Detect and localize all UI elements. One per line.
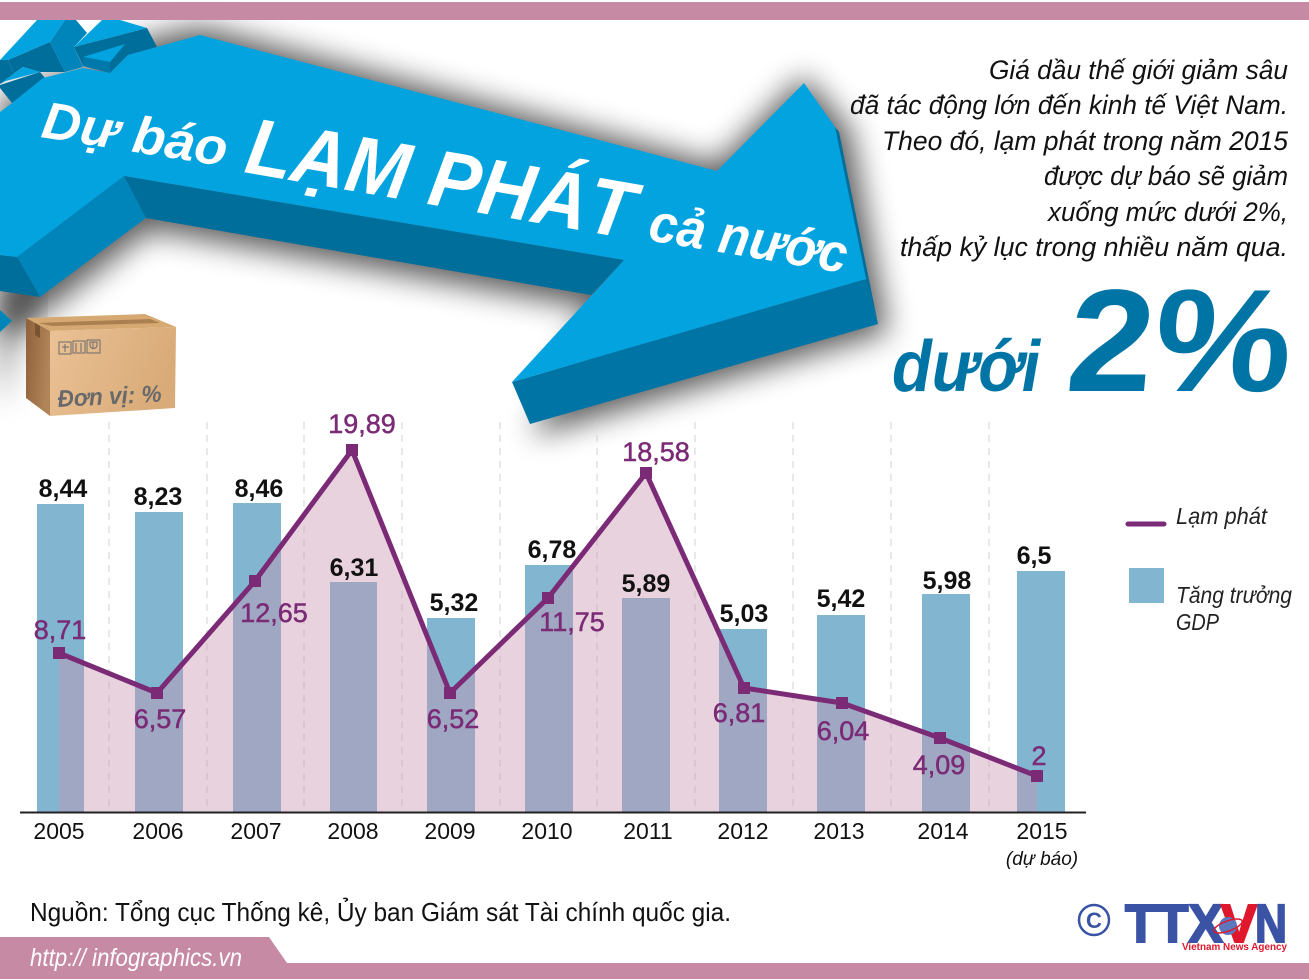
logo: TTXVN: Vietnam News Agency [1182, 941, 1287, 953]
inflation value labels: 4,09 [913, 750, 965, 780]
inflation value labels: 6,81 [713, 698, 765, 728]
GDP value labels: 6,31 [330, 554, 378, 582]
back ribbon left [0, 20, 65, 60]
logo: TTXVN: C [1086, 908, 1102, 933]
grid lines [109, 422, 989, 812]
year labels [33, 818, 1078, 870]
year labels: 2015 [1016, 818, 1068, 844]
footer band with URL: http:// infographics.vn [30, 944, 242, 972]
year labels: (dự báo) [1006, 849, 1078, 870]
GDP bars [37, 503, 1065, 812]
title: LẠM PHÁT [240, 101, 647, 256]
GDP value labels: 5,42 [817, 585, 865, 613]
back ribbon right [74, 20, 147, 47]
year labels: 2010 [521, 818, 573, 844]
year labels: 2007 [230, 818, 282, 844]
GDP value labels: 5,98 [923, 567, 971, 595]
year labels: 2013 [813, 818, 865, 844]
axis baseline [20, 812, 1086, 814]
inflation area [59, 450, 1037, 812]
legend: GDP [1176, 609, 1220, 635]
inflation value labels: 6,04 [817, 716, 869, 746]
title: cả nước [645, 193, 852, 285]
inflation value labels [34, 409, 1047, 780]
inflation value labels: 11,75 [539, 607, 605, 637]
inflation value labels: 6,52 [427, 704, 479, 734]
intro text [850, 55, 1289, 262]
big figure: dưới 2%: dưới [892, 327, 1042, 407]
big figure: dưới 2% [892, 259, 1300, 422]
inflation value labels: 6,57 [134, 704, 186, 734]
head bottom side [512, 279, 878, 424]
title: Dự báo [38, 92, 232, 178]
legend: Tăng trưởng [1176, 582, 1292, 608]
logo: TTXVN: TTX [1125, 894, 1223, 954]
inflation value labels: 19,89 [328, 409, 396, 439]
intro text: đã tác động lớn đến kinh tế Việt Nam. [850, 90, 1288, 120]
logo: TTXVN: V [1221, 894, 1257, 954]
GDP value labels: 8,46 [235, 475, 283, 503]
top band [0, 2, 1309, 20]
arrow: title banner [0, 20, 888, 436]
legend: Lạm phát [1176, 503, 1269, 529]
left small fragment [0, 310, 12, 332]
intro text: xuống mức dưới 2%, [1046, 197, 1288, 227]
GDP value labels: 5,89 [622, 570, 670, 598]
year labels: 2005 [33, 818, 85, 844]
GDP value labels: 8,44 [39, 475, 87, 503]
GDP value labels: 6,5 [1017, 542, 1051, 570]
GDP value labels [39, 475, 1051, 628]
inflation value labels: 8,71 [34, 615, 86, 645]
chart [20, 409, 1086, 870]
arrow shadow [0, 26, 888, 436]
year labels: 2012 [717, 818, 769, 844]
year labels: 2006 [132, 818, 184, 844]
year labels: 2009 [424, 818, 476, 844]
GDP value labels: 5,32 [430, 589, 478, 617]
top surface [0, 35, 866, 382]
year labels: 2011 [623, 818, 673, 844]
inflation value labels: 12,65 [240, 598, 308, 628]
inflation value labels: 18,58 [622, 437, 690, 467]
intro text: thấp kỷ lục trong nhiều năm qua. [900, 232, 1288, 262]
source note: Nguồn: Tổng cục Thống kê, Ủy ban Giám sát Tài chính quốc gia. [30, 896, 731, 927]
intro text: Giá dầu thế giới giảm sâu [989, 55, 1288, 85]
year labels: 2014 [917, 818, 969, 844]
intro text: được dự báo sẽ giảm [1044, 161, 1288, 191]
intro text: Theo đó, lạm phát trong năm 2015 [882, 126, 1289, 156]
GDP value labels: 5,03 [720, 600, 768, 628]
icon: cardboard box unit label [26, 314, 176, 416]
icon: cardboard box unit label: Đơn vị: % [57, 381, 162, 413]
GDP value labels: 6,78 [528, 536, 576, 564]
title [38, 92, 852, 285]
big figure: dưới 2%: 2% [1061, 259, 1300, 422]
footer band with URL [0, 937, 1309, 979]
inflation value labels: 2 [1031, 741, 1047, 771]
logo: TTXVN [1079, 894, 1287, 954]
legend [1128, 503, 1292, 635]
inflation line [53, 444, 1043, 782]
GDP value labels: 8,23 [134, 483, 182, 511]
year labels: 2008 [327, 818, 379, 844]
under side inner [124, 176, 624, 295]
logo: TTXVN: N [1255, 894, 1287, 954]
